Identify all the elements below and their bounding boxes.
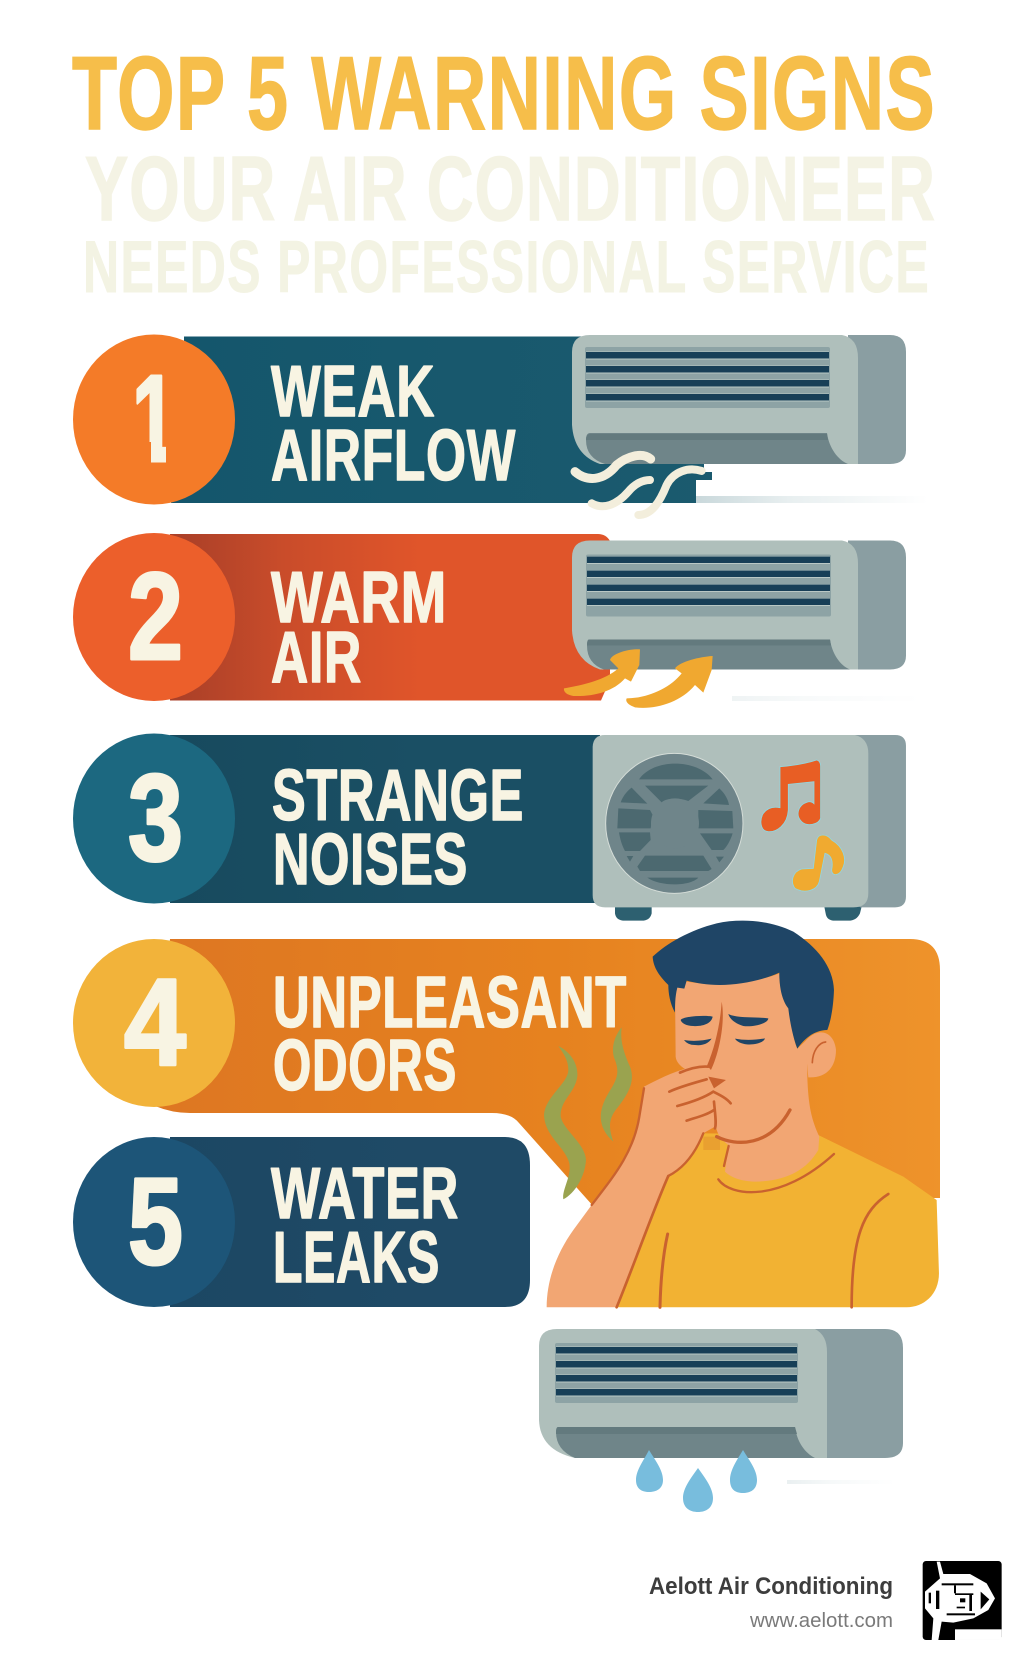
icon: airflow waves bbox=[575, 455, 702, 515]
ear bbox=[805, 1032, 836, 1077]
logo bbox=[923, 1561, 1002, 1640]
arm and finger outlines bbox=[592, 1067, 888, 1307]
company name: Aelott Air Conditioning bbox=[649, 1573, 893, 1600]
faded shadow 2 bbox=[732, 696, 922, 701]
bar 1 bbox=[171, 336, 712, 503]
number circle 2 bbox=[73, 533, 235, 701]
number circle 3 bbox=[73, 734, 235, 904]
hair bbox=[653, 921, 834, 1049]
icon: yellow music note bbox=[792, 835, 845, 891]
label 3: NOISES bbox=[273, 820, 468, 900]
row 5: water leaks bbox=[73, 1137, 530, 1307]
label 2: AIR bbox=[271, 618, 362, 698]
label 4 bbox=[273, 963, 627, 1106]
label 4: UNPLEASANT bbox=[273, 963, 627, 1043]
label 5: LEAKS bbox=[273, 1218, 440, 1298]
nose line bbox=[707, 1002, 723, 1071]
label 3: STRANGE bbox=[272, 756, 524, 836]
title bbox=[72, 36, 936, 308]
icon: outdoor AC unit with music notes bbox=[593, 735, 906, 921]
icon: water drops bbox=[636, 1450, 757, 1512]
faded shadow 5 bbox=[787, 1480, 895, 1484]
icon: wall AC unit 1 bbox=[572, 335, 906, 464]
label 5: WATER bbox=[271, 1154, 459, 1234]
arm and hand bbox=[547, 1065, 717, 1307]
faded shadow 1 bbox=[696, 496, 928, 503]
label 4: ODORS bbox=[273, 1026, 457, 1106]
number circle 1 bbox=[73, 334, 235, 504]
bar 3 bbox=[170, 735, 600, 903]
illustration: man pinching nose bbox=[544, 921, 939, 1307]
label 5 bbox=[271, 1154, 459, 1298]
collar patch bbox=[703, 1137, 720, 1150]
label 2: WARM bbox=[271, 558, 447, 638]
number circle 5 bbox=[73, 1137, 235, 1307]
icon: wall AC unit with drips bbox=[539, 1329, 903, 1512]
panel 4 bbox=[155, 939, 940, 1215]
row 4: unpleasant odors bbox=[73, 921, 940, 1307]
icon: wall AC unit 2 bbox=[572, 540, 906, 670]
brows and eyes bbox=[681, 1014, 768, 1045]
label 1 bbox=[271, 352, 516, 496]
website: www.aelott.com bbox=[749, 1610, 893, 1632]
number 1: 1 bbox=[132, 351, 176, 488]
row 1: weak airflow bbox=[73, 334, 928, 515]
icon: orange music note bbox=[761, 760, 821, 832]
footer: company name and website bbox=[649, 1573, 893, 1632]
number 2: 2 bbox=[128, 549, 183, 686]
row 2: warm air bbox=[73, 533, 922, 708]
label 1: AIRFLOW bbox=[271, 416, 516, 496]
number 4: 4 bbox=[124, 955, 186, 1092]
label 3 bbox=[272, 756, 524, 900]
label 2 bbox=[271, 558, 447, 698]
number 5: 5 bbox=[128, 1154, 183, 1291]
thumb tip bbox=[708, 1077, 726, 1088]
bar 2 bbox=[170, 534, 610, 700]
neck and face bbox=[675, 973, 819, 1182]
bar 5 bbox=[170, 1137, 530, 1307]
shirt bbox=[615, 1133, 939, 1307]
odor wisps bbox=[544, 1027, 632, 1199]
number circle 4 bbox=[73, 939, 235, 1107]
label 1: WEAK bbox=[271, 352, 435, 432]
number 3: 3 bbox=[128, 750, 183, 887]
row 3: strange noises bbox=[73, 734, 906, 921]
icon: warm air arrows bbox=[564, 649, 713, 708]
